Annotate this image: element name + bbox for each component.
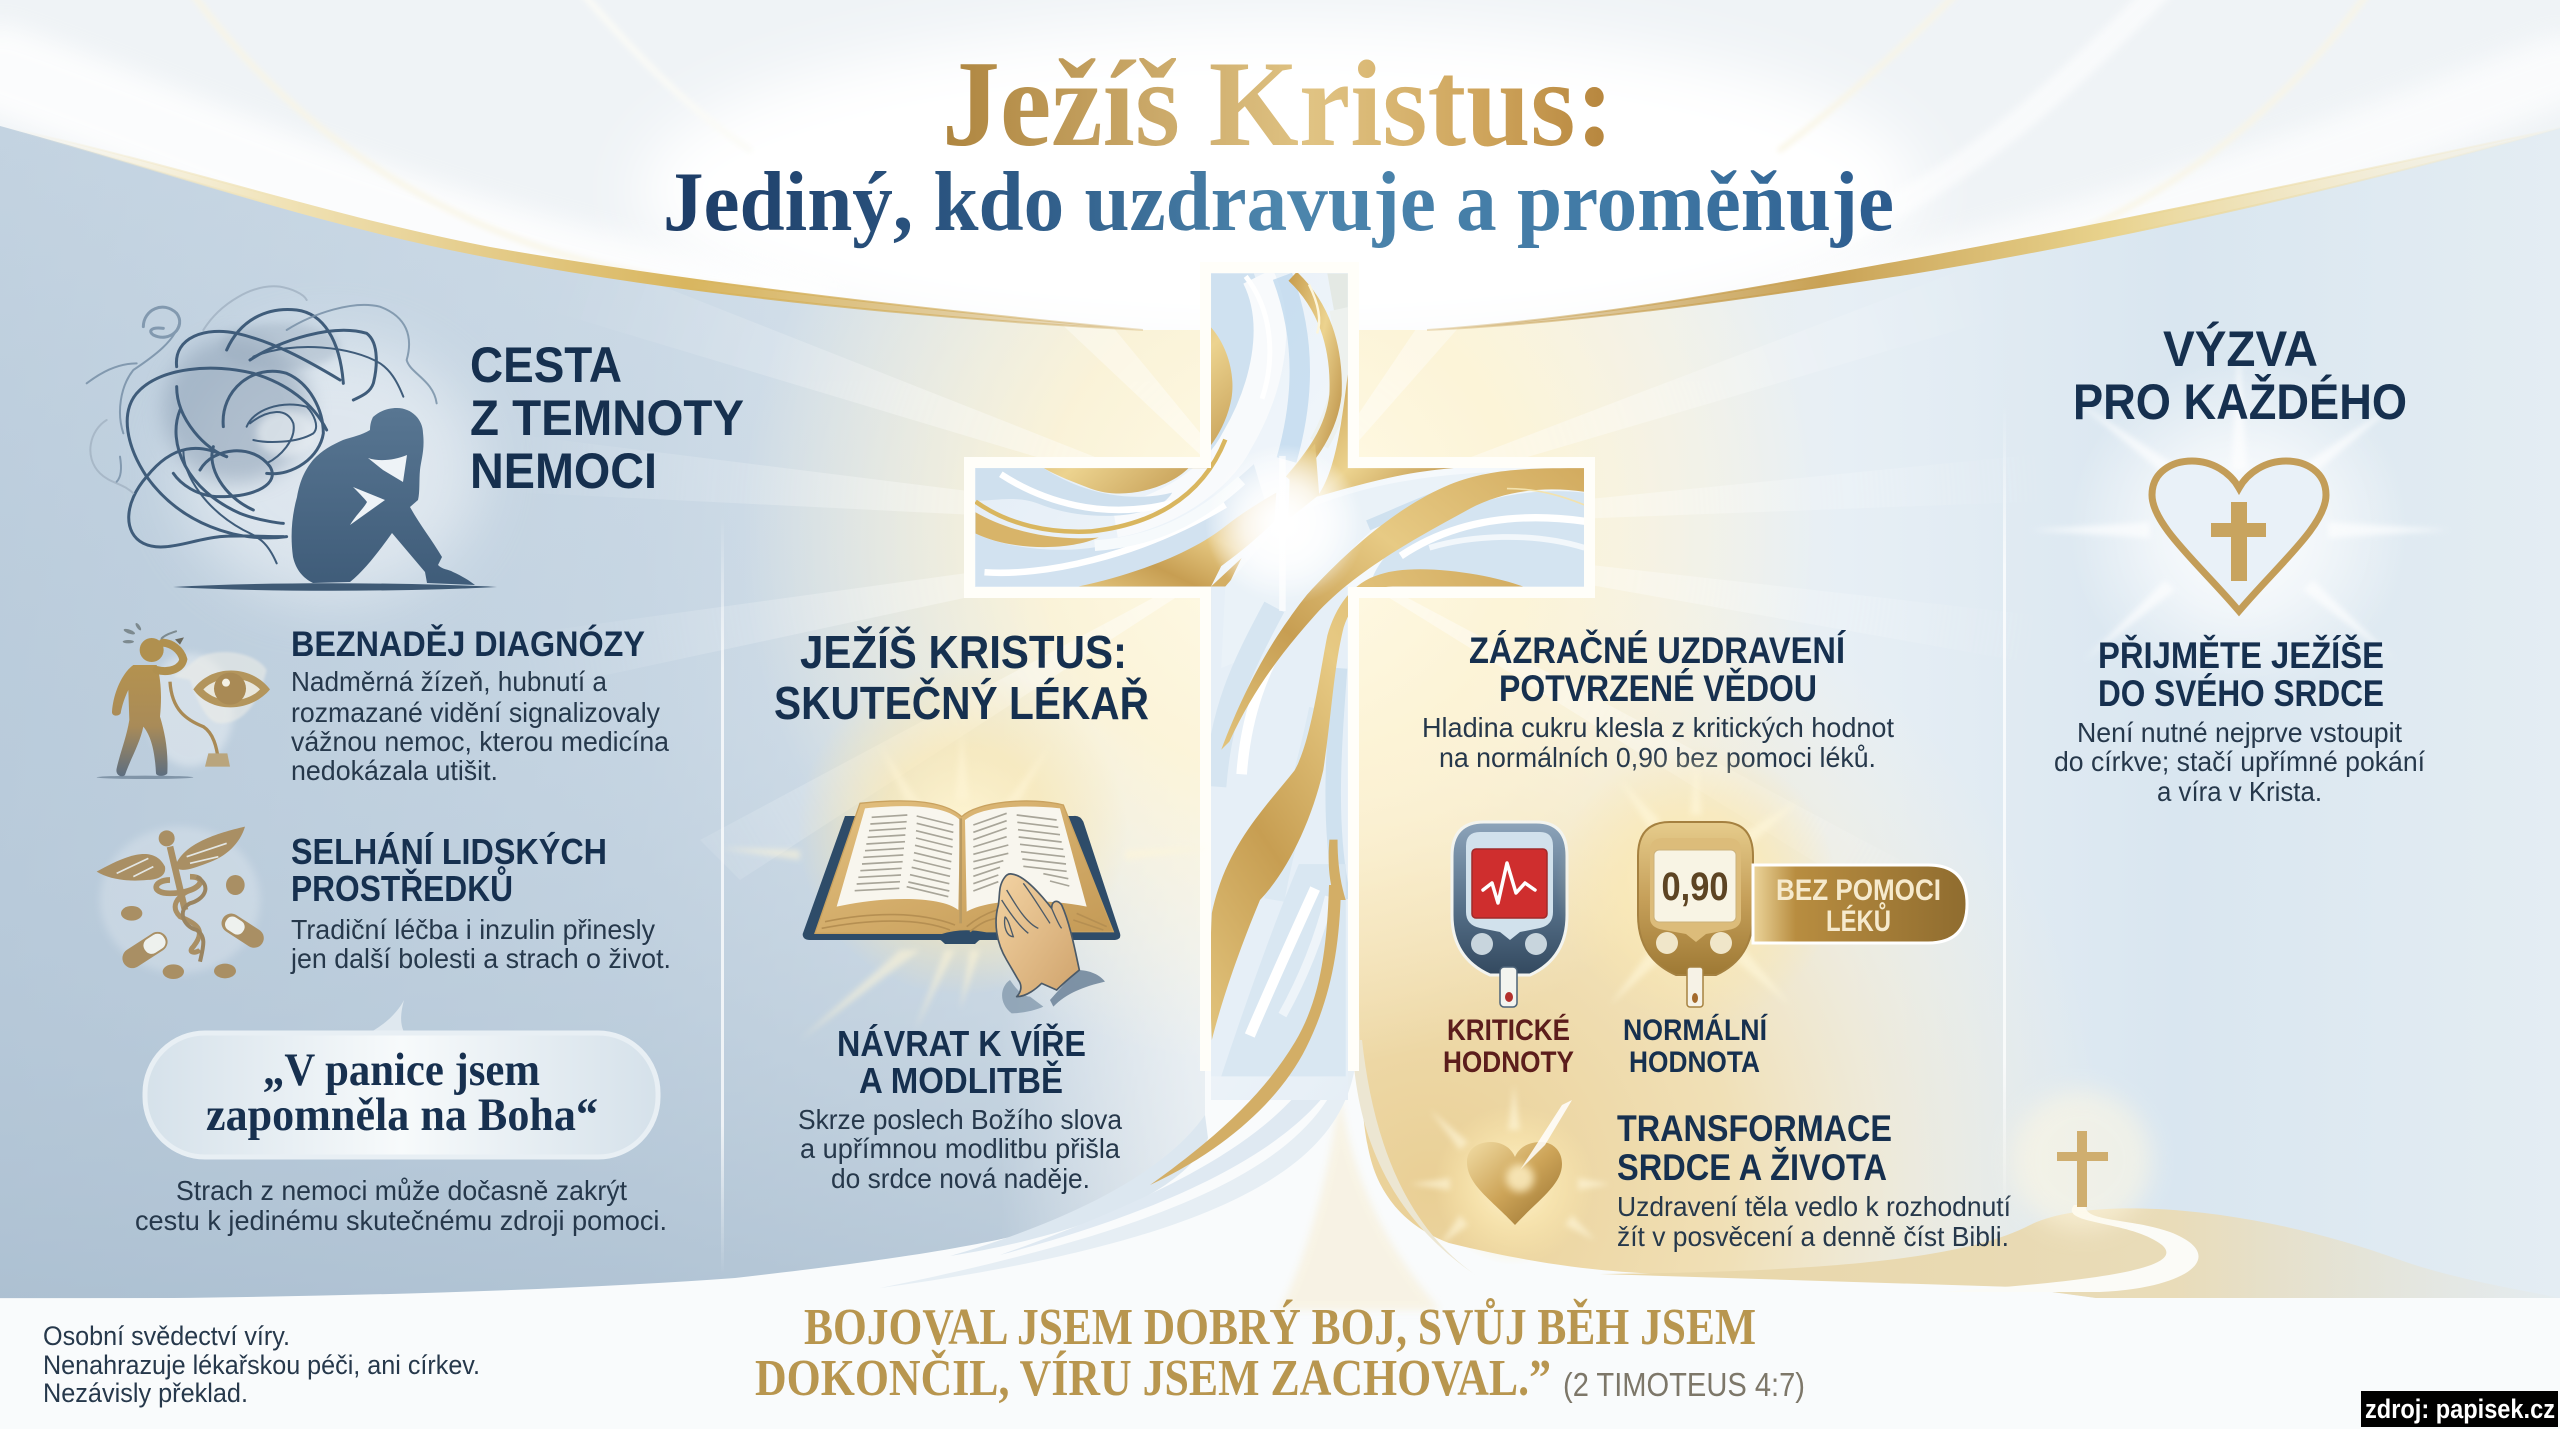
label: Kritické hodnoty: KRITICKÉ [1447,1013,1570,1047]
icon: figure with headache and blurred eye [97,622,270,779]
text block: Selhání lidských prostředků [290,831,671,974]
text block: Transformace srdce a života: žít v posvěcení a denně číst Bibli. [1617,1221,2009,1252]
label: Normální hodnota: HODNOTA [1629,1046,1760,1079]
badge: Bez pomoci léků: BEZ POMOCI [1776,874,1941,907]
heading: Ježíš Kristus skutečný lékař: JEŽÍŠ KRISTUS: [800,626,1127,678]
callout: quote bubble: „V panice jsem [263,1044,540,1096]
text block: Transformace srdce a života [1617,1108,2011,1252]
text block: Selhání lidských prostředků: SELHÁNÍ LIDSKÝCH [291,831,607,872]
heading: Výzva pro každého: VÝZVA [2163,321,2318,377]
label: Kritické hodnoty [1443,1013,1574,1079]
heading: Cesta z temnoty nemoci: NEMOCI [470,443,657,499]
icon: glucose meter normal with value: 0,90 [1662,865,1728,909]
footer disclaimer: Nenahrazuje lékařskou péči, ani církev. [43,1350,480,1380]
text block: Selhání lidských prostředků: Tradiční léčba i inzulin přinesly [291,914,655,945]
lower right fold of blue beside the gold [1221,864,1346,1076]
text block: Přijměte Ježíše do svého srdce: DO SVÉHO SRDCE [2098,673,2384,714]
heading: Ježíš Kristus skutečný lékař [774,626,1149,729]
icon: despairing figure with scribbles [87,286,497,600]
callout: quote bubble: zapomněla na Boha“ [206,1089,598,1141]
white bottom band with trunk flare [0,880,2560,1429]
text block: Návrat k víře a modlitbě: NÁVRAT K VÍŘE [837,1022,1086,1064]
icon: glucose meter critical [1452,822,1567,1007]
text block: Zázračné uzdravení potvrzené vědou: na normálních 0,90 bez pomoci léků. [1439,742,1876,773]
heading: Výzva pro každého: PRO KAŽDÉHO [2073,374,2407,430]
icon: open Bible with praying hands [720,665,1210,1040]
text block: Návrat k víře a modlitbě: a upřímnou modlitbu přišla [800,1133,1120,1164]
label: Kritické hodnoty: HODNOTY [1443,1046,1574,1079]
text block: Beznaděj diagnózy [291,624,669,786]
text block: Návrat k víře a modlitbě: A MODLITBĚ [859,1059,1063,1101]
hill with path to small cross [1600,1205,2560,1298]
text block: Zázračné uzdravení potvrzené vědou: POTVRZENÉ VĚDOU [1499,667,1817,709]
heading: Ježíš Kristus skutečný lékař: SKUTEČNÝ LÉKAŘ [774,677,1149,729]
text block: Selhání lidských prostředků: PROSTŘEDKŮ [291,864,513,909]
right gold wedge [1317,374,1454,497]
text block: Transformace srdce a života: TRANSFORMACE [1617,1108,1892,1149]
text block: Transformace srdce a života: SRDCE A ŽIVOTA [1617,1146,1887,1188]
text block: Přijměte Ježíše do svého srdce: do církve; stačí upřímné pokání [2054,746,2425,777]
Bible verse [755,1297,1805,1407]
label: Normální hodnota [1623,1013,1768,1079]
text block: Beznaděj diagnózy: rozmazané vidění signalizovaly [291,697,660,728]
text block: Zázračné uzdravení potvrzené vědou [1422,629,1894,773]
gold accent line right [1427,128,2560,330]
text block: Selhání lidských prostředků: jen další bolesti a strach o život. [290,943,671,974]
text block: Návrat k víře a modlitbě: Skrze poslech Božího slova [798,1104,1122,1135]
footer disclaimer [43,1321,480,1408]
badge: Bez pomoci léků: LÉKŮ [1826,902,1891,938]
text block: Beznaděj diagnózy: nedokázala utišit. [291,755,498,786]
Bible verse: (2 TIMOTEUS 4:7) [1563,1366,1805,1403]
heading: Výzva pro každého [2073,321,2407,430]
text block: Přijměte Ježíše do svého srdce: PŘIJMĚTE JEŽÍŠE [2098,634,2384,676]
text block: Přijměte Ježíše do svého srdce: a víra v Krista. [2157,776,2322,807]
dividers [721,516,724,1276]
text block: Návrat k víře a modlitbě [798,1022,1122,1194]
title [663,35,1894,249]
footer disclaimer: Nezávisly překlad. [43,1378,248,1408]
text block: Přijměte Ježíše do svého srdce: Není nutné nejprve vstoupit [2077,717,2402,748]
gold accent line left [0,126,1143,330]
upper vertical [1211,274,1256,450]
heading: Cesta z temnoty nemoci [470,337,744,499]
light rays from the cross [701,326,1684,847]
text block: Transformace srdce a života: Uzdravení těla vedlo k rozhodnutí [1617,1191,2011,1222]
lower trunk gold stripe [1150,885,1341,1185]
text block: Beznaděj diagnózy: Nadměrná žízeň, hubnutí a [291,666,607,697]
callout: quote bubble [145,1000,658,1157]
footer disclaimer: Osobní svědectví víry. [43,1321,290,1351]
text block: caption under quote: Strach z nemoci může dočasně zakrýt [176,1175,627,1206]
background: light top streaks [0,0,2560,360]
text block: Zázračné uzdravení potvrzené vědou: ZÁZRAČNÉ UZDRAVENÍ [1469,629,1847,671]
text block: Zázračné uzdravení potvrzené vědou: Hladina cukru klesla z kritických hodnot [1422,712,1894,743]
text block: Beznaděj diagnózy: BEZNADĚJ DIAGNÓZY [291,624,645,664]
title line 2: Jediný, kdo uzdravuje a proměňuje [663,155,1894,249]
crescent gold [1044,327,1232,493]
icon: heart with cross [2030,340,2450,700]
heading: Cesta z temnoty nemoci: CESTA [470,337,622,393]
heading: Cesta z temnoty nemoci: Z TEMNOTY [470,390,744,446]
text block: caption under quote [135,1175,667,1236]
icon: glucose meter normal with value [1556,745,1836,1025]
right arm [1372,491,1584,587]
text block: Návrat k víře a modlitbě: do srdce nová naděje. [831,1163,1090,1194]
badge: Bez pomoci léků [1753,865,1967,943]
Bible verse: DOKONČIL, VÍRU JSEM ZACHOVAL.” [755,1349,1551,1407]
left arm [976,468,1172,516]
text block: Beznaděj diagnózy: vážnou nemoc, kterou medicína [291,726,669,757]
icon: caduceus and pills [97,827,267,979]
title line 1: Ježíš Kristus: [942,35,1614,172]
glow [1212,452,1348,588]
lower vertical [1211,586,1348,982]
icon: golden heart [1410,1085,1610,1265]
Bible verse: BOJOVAL JSEM DOBRÝ BOJ, SVŮJ BĚH JSEM [804,1297,1756,1356]
text block: Přijměte Ježíše do svého srdce [2054,634,2425,807]
central flowing cross [970,270,1590,1185]
label: Normální hodnota: NORMÁLNÍ [1623,1013,1768,1047]
icon: small cross on hill [2012,1090,2152,1230]
text block: caption under quote: cestu k jedinému skutečnému zdroji pomoci. [135,1205,667,1236]
